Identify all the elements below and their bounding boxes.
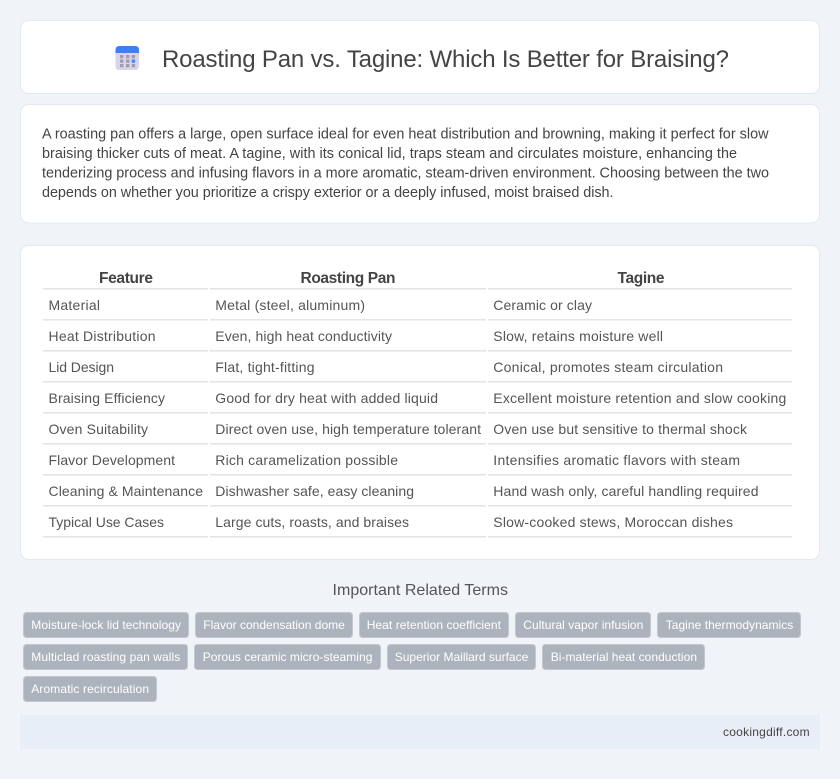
row: cleaning and maintenance: Cleaning & Maintenance xyxy=(48,483,203,499)
row: oven suitability: Oven use but sensitive to thermal shock xyxy=(493,421,748,437)
row: lid design: Conical, promotes steam circulation xyxy=(493,359,723,375)
icon: calendar xyxy=(116,46,139,70)
row: lid design: Flat, tight-fitting xyxy=(215,359,314,375)
row: heat distribution xyxy=(48,328,663,344)
table header row: Feature xyxy=(99,270,153,287)
tag: bi-material xyxy=(542,644,704,670)
row: flavor development: Rich caramelization possible xyxy=(215,452,398,468)
tag: tagine thermodynamics: Tagine thermodynamics xyxy=(666,618,793,632)
row: flavor development: Intensifies aromatic flavors with steam xyxy=(493,452,740,468)
row: cleaning and maintenance xyxy=(48,483,758,499)
tag: tagine thermodynamics xyxy=(658,612,800,638)
row: oven suitability xyxy=(48,421,748,437)
intro paragraph: depends on whether you prioritize a crispy exterior or a deeply infused, moist braised dish. xyxy=(42,185,614,201)
row: material: Material xyxy=(48,297,100,313)
table header row xyxy=(99,270,665,287)
tag: flavor condensation: Flavor condensation dome xyxy=(203,618,345,632)
tag: moisture-lock: Moisture-lock lid technology xyxy=(31,618,181,632)
row: heat distribution: Heat Distribution xyxy=(48,328,156,344)
tag: porous ceramic: Porous ceramic micro-steaming xyxy=(203,650,372,664)
panel: comparison table xyxy=(20,246,820,560)
row: typical use cases: Typical Use Cases xyxy=(48,514,164,530)
row: oven suitability: Oven Suitability xyxy=(48,421,148,437)
row: typical use cases: Large cuts, roasts, and braises xyxy=(215,514,409,530)
row: material: Metal (steel, aluminum) xyxy=(215,297,365,313)
row: cleaning and maintenance: Hand wash only, careful handling required xyxy=(493,483,758,499)
row: material: Ceramic or clay xyxy=(493,297,592,313)
tag: flavor condensation xyxy=(196,612,352,638)
tag: cultural vapor xyxy=(516,612,650,638)
tag: superior maillard xyxy=(388,644,536,670)
row: flavor development xyxy=(48,452,740,468)
tag: moisture-lock xyxy=(24,612,188,638)
intro paragraph: braising thicker cuts of meat. A tagine, with its conical lid, traps steam and circulates moisture, enhancing the xyxy=(42,146,737,162)
tag: superior maillard: Superior Maillard surface xyxy=(395,650,529,664)
row: lid design: Lid Design xyxy=(48,359,114,375)
tag: cultural vapor: Cultural vapor infusion xyxy=(523,618,643,632)
row: oven suitability: Direct oven use, high temperature tolerant xyxy=(215,421,481,437)
tag: aromatic recirculation: Aromatic recirculation xyxy=(31,682,149,696)
row: braising efficiency: Braising Efficiency xyxy=(48,390,165,406)
intro paragraph xyxy=(42,126,769,201)
tag: bi-material: Bi-material heat conduction xyxy=(551,650,697,664)
row: braising efficiency: Good for dry heat with added liquid xyxy=(215,390,438,406)
footer source: cookingdiff.com xyxy=(723,725,810,739)
row: braising efficiency xyxy=(48,390,786,406)
row: flavor development: Flavor Development xyxy=(48,452,175,468)
row: lid design xyxy=(48,359,723,375)
row: braising efficiency: Excellent moisture retention and slow cooking xyxy=(493,390,786,406)
row: typical use cases xyxy=(48,514,733,530)
tag: multiclad xyxy=(24,644,188,670)
tag: heat retention: Heat retention coefficient xyxy=(367,618,502,632)
row: heat distribution: Even, high heat conductivity xyxy=(215,328,392,344)
table header row: Tagine xyxy=(618,270,665,287)
row: typical use cases: Slow-cooked stews, Moroccan dishes xyxy=(493,514,733,530)
footer bar xyxy=(20,715,820,749)
tag: heat retention xyxy=(360,612,508,638)
tag: aromatic recirculation xyxy=(24,676,156,702)
intro paragraph: tenderizing process and infusing flavors in a more aromatic, steam-driven environment. Choosing between the two xyxy=(42,166,769,182)
tag: porous ceramic xyxy=(194,644,380,670)
row: cleaning and maintenance: Dishwasher safe, easy cleaning xyxy=(215,483,414,499)
panel: introduction xyxy=(20,104,820,223)
title: Roasting Pan vs. Tagine: Which Is Better for Braising? xyxy=(162,46,729,73)
tag: multiclad: Multiclad roasting pan walls xyxy=(31,650,180,664)
related term tags xyxy=(24,612,800,702)
header panel xyxy=(20,20,820,94)
row: heat distribution: Slow, retains moisture well xyxy=(493,328,663,344)
row: material xyxy=(48,297,592,313)
table header row: Roasting Pan xyxy=(300,270,396,287)
intro paragraph: A roasting pan offers a large, open surface ideal for even heat distribution and browning, making it perfect for slow xyxy=(42,126,769,142)
related terms heading: Important Related Terms xyxy=(332,582,508,599)
